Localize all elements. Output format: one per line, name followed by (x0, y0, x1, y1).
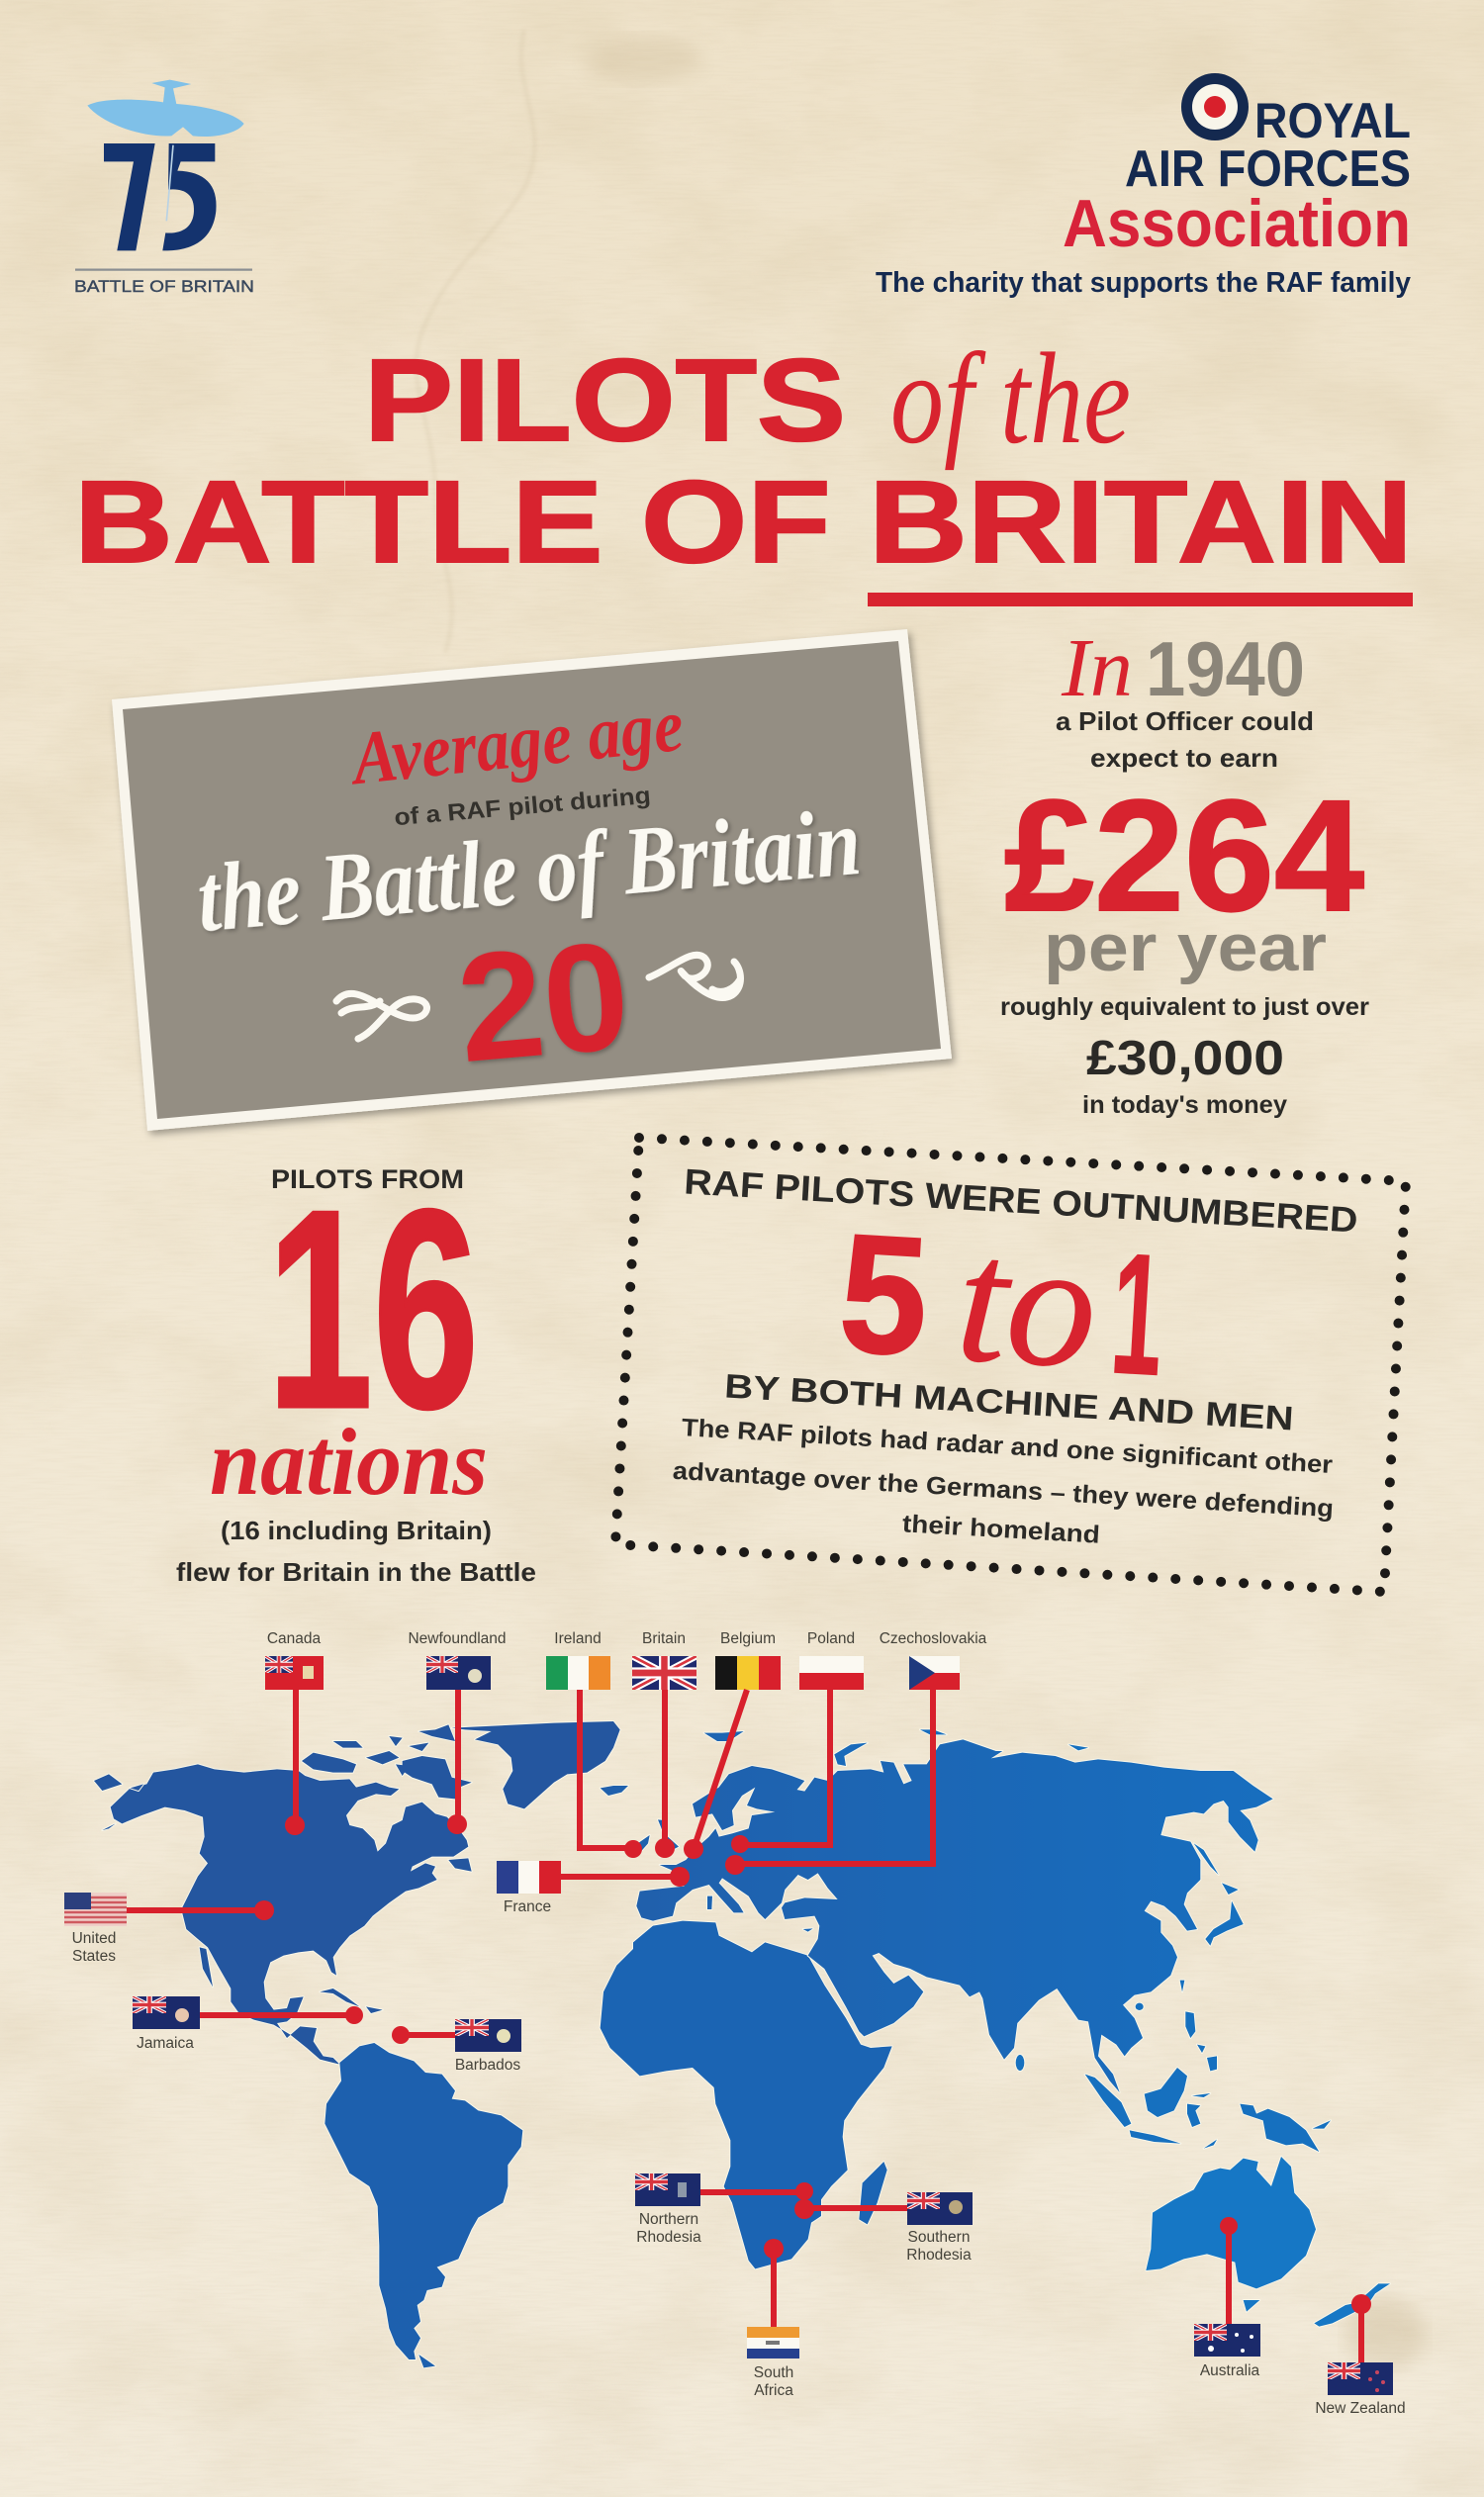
panel: 1940 pay: In (1061, 622, 1133, 714)
marker: Jamaica (133, 1996, 363, 2052)
map: Australia and New Zealand (1146, 2157, 1390, 2327)
world map (94, 1721, 1390, 2367)
stat: 5 to 1: 5 (835, 1199, 933, 1392)
heading: Average age: Average age (345, 684, 687, 801)
title: BATTLE OF BRITAIN (74, 457, 1413, 588)
marker: Newfoundland: Newfoundland (408, 1630, 507, 1647)
marker: Barbados (392, 2019, 521, 2074)
body text: The RAF pilots had radar and one significant other (681, 1414, 1334, 1479)
panel: 16 nations: (16 including Britain) (221, 1516, 492, 1545)
icon: RAF roundel (1181, 73, 1249, 140)
heading: RAF pilots were outnumbered: RAF PILOTS WERE OUTNUMBERED (683, 1160, 1359, 1241)
marker: United States: United (72, 1930, 116, 1947)
marker: Northern Rhodesia: Rhodesia (636, 2229, 701, 2246)
title (74, 325, 1413, 606)
stat: 5 to 1: 1 (1106, 1217, 1168, 1413)
panel: 16 nations: 16 (267, 1151, 479, 1467)
panel: 1940 pay: £264 (1004, 767, 1364, 944)
panel: 16 nations: nations (210, 1409, 488, 1515)
title: PILOTS (364, 335, 846, 466)
marker: Belgium: Belgium (720, 1630, 776, 1647)
logo: Royal Air Forces Association (876, 73, 1411, 299)
text: of a RAF pilot during: of a RAF pilot during (393, 783, 652, 831)
marker: South Africa: Africa (754, 2382, 793, 2399)
marker: Jamaica: Jamaica (137, 2035, 194, 2052)
marker: Northern Rhodesia (635, 2173, 813, 2246)
logo: Battle of Britain 75 (74, 80, 254, 296)
logo: Royal Air Forces Association: Association (1063, 186, 1411, 261)
panel: 1940 pay: £30,000 (1086, 1032, 1284, 1085)
marker: New Zealand: New Zealand (1315, 2400, 1406, 2417)
marker: South Africa (747, 2239, 799, 2399)
marker: Ireland: Ireland (554, 1630, 602, 1647)
marker: United States (64, 1893, 274, 1965)
flourish left (336, 993, 426, 1039)
logo: Royal Air Forces Association: The charity that supports the RAF family (876, 267, 1411, 299)
panel: 1940 pay: 1940 (1146, 625, 1305, 712)
marker: Southern Rhodesia (794, 2192, 973, 2264)
marker: Czechoslovakia (725, 1630, 987, 1875)
icon: spitfire silhouette (87, 80, 244, 137)
marker: Southern Rhodesia: Rhodesia (906, 2247, 972, 2264)
body text (672, 1414, 1335, 1549)
marker: United States: States (72, 1948, 116, 1965)
stat: 5 to 1: to (953, 1201, 1102, 1405)
map: Madagascar (859, 2162, 887, 2224)
marker: Belgium (684, 1630, 781, 1859)
marker: Australia (1194, 2217, 1260, 2379)
marker: Canada: Canada (267, 1630, 322, 1647)
panel: 1940 pay (1000, 622, 1369, 1119)
marker: Northern Rhodesia: Northern (639, 2211, 698, 2228)
panel: 1940 pay: in today's money (1082, 1091, 1287, 1119)
marker: Newfoundland (408, 1630, 507, 1834)
marker: Ireland (546, 1630, 642, 1858)
flourish right (649, 955, 740, 997)
panel: 1940 pay: per year (1044, 910, 1327, 985)
numeral 5 (162, 143, 217, 250)
marker: Poland: Poland (807, 1630, 855, 1647)
marker: France (497, 1861, 690, 1915)
body text: their homeland (901, 1510, 1101, 1549)
panel: outnumbered dotted box (615, 1138, 1406, 1592)
marker: Canada (265, 1630, 324, 1835)
marker: France: France (504, 1898, 551, 1915)
marker: Britain (632, 1630, 696, 1858)
marker: Southern Rhodesia: Southern (908, 2229, 970, 2246)
panel: 1940 pay: expect to earn (1090, 743, 1278, 773)
marker: Poland (731, 1630, 864, 1853)
map: South America and Caribbean (320, 1988, 522, 2367)
logo: Royal Air Forces Association: AIR FORCES (1125, 140, 1411, 198)
heading: the Battle of Britain: the Battle of Britain (193, 788, 865, 953)
panel: 16 nations (176, 1151, 536, 1587)
map: Eurasia and Africa (601, 1729, 1273, 2268)
panel: 1940 pay: a Pilot Officer could (1056, 706, 1314, 736)
marker: Britain: Britain (642, 1630, 686, 1647)
logo: Royal Air Forces Association: ROYAL (1254, 93, 1411, 148)
map: Americas and Greenland (94, 1721, 620, 2065)
marker: South Africa: South (754, 2364, 793, 2381)
panel: average age card (112, 629, 952, 1131)
subheading: by both machine and men: BY BOTH MACHINE AND MEN (723, 1367, 1295, 1438)
title: of the (890, 325, 1131, 471)
panel: 16 nations: PILOTS FROM (271, 1164, 464, 1194)
marker: Barbados: Barbados (455, 2057, 520, 2074)
marker: Czechoslovakia: Czechoslovakia (880, 1630, 987, 1647)
map: East and South-East Asia islands (1016, 1744, 1331, 2152)
stat: 5 to 1 (835, 1194, 1169, 1413)
panel: 16 nations: flew for Britain in the Battle (176, 1557, 536, 1587)
marker: New Zealand (1315, 2294, 1406, 2417)
marker: Australia: Australia (1200, 2362, 1260, 2379)
panel: 1940 pay: roughly equivalent to just over (1000, 993, 1369, 1021)
stat: 20: 20 (451, 909, 635, 1094)
logo: Battle of Britain 75: BATTLE OF BRITAIN (74, 277, 254, 296)
body text: advantage over the Germans – they were defending (672, 1457, 1335, 1523)
numeral 7 (104, 143, 155, 250)
